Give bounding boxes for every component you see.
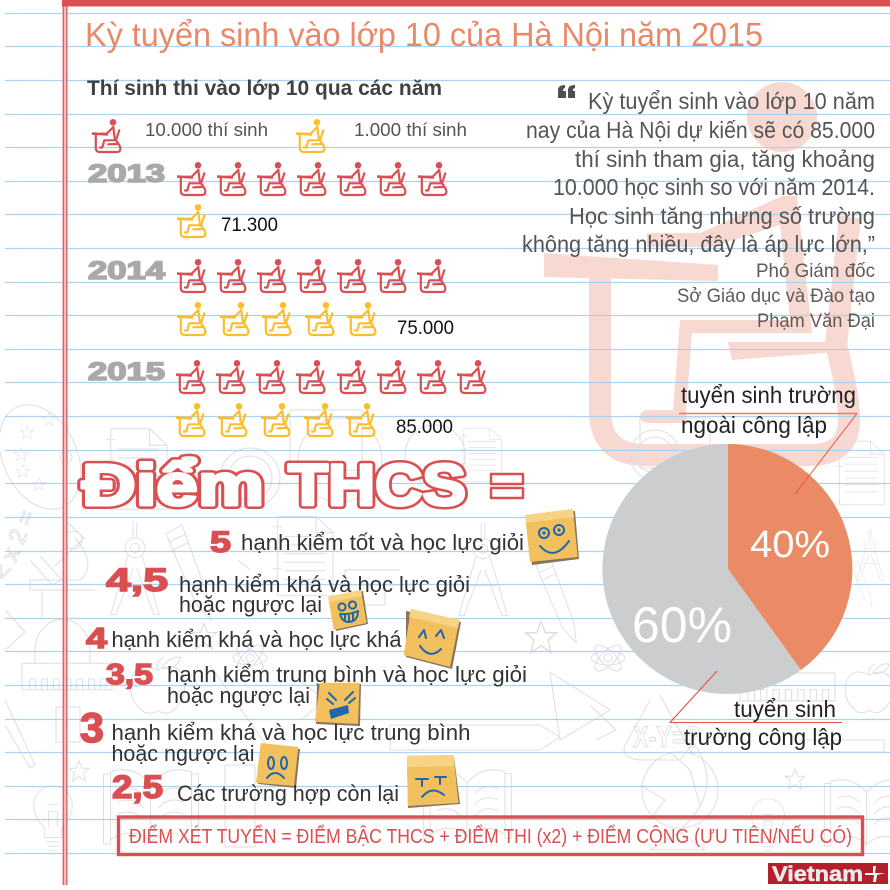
quote attribution: Phạm Văn Đại — [757, 310, 875, 332]
legend — [92, 119, 467, 152]
pictogram row: 2013: 71.300 — [221, 215, 278, 236]
score row: 2,5 — [112, 769, 399, 806]
score row: 4,5 — [106, 562, 470, 617]
score row: 5 — [210, 526, 524, 559]
score row: 3,5: 3,5 — [106, 659, 153, 691]
pie label: private schools — [679, 382, 857, 494]
title: Kỳ tuyển sinh vào lớp 10 của Hà Nội năm 2015 — [85, 16, 763, 53]
pie label: public schools — [670, 671, 842, 750]
pictogram row: 2013 — [88, 160, 446, 237]
score row: 3,5: hoặc ngược lại — [167, 683, 310, 708]
legend: 1.000 thí sinh — [354, 120, 467, 140]
score row: 3: hoặc ngược lại — [112, 741, 254, 766]
pie chart — [602, 444, 852, 694]
score row: 5: hạnh kiểm tốt và học lực giỏi — [241, 530, 524, 555]
pie label: public schools: trường công lập — [684, 724, 842, 750]
icon: sticky note frown — [407, 755, 460, 808]
pie label: public schools: tuyển sinh — [734, 696, 836, 722]
score row: 3: hạnh kiểm khá và học lực trung bình — [112, 720, 470, 745]
big desk watermark icon — [544, 82, 850, 455]
pictogram row: 2013: 2013 — [88, 160, 165, 188]
pictogram row: 2015: 85.000 — [396, 417, 453, 438]
score row: 2,5: Các trường hợp còn lại — [177, 781, 399, 806]
legend: 10.000 thí sinh — [145, 120, 268, 140]
score row: 5: 5 — [210, 526, 231, 559]
quote text: Học sinh tăng nhưng số trường — [569, 203, 875, 229]
score row: 4,5: 4,5 — [106, 562, 168, 598]
pie chart: 60% — [632, 597, 732, 653]
pie chart: 40% — [750, 524, 830, 566]
score row: 4: 4 — [86, 623, 107, 655]
icon: quote mark — [558, 85, 575, 98]
heading: Điểm THCS =: Điểm — [82, 453, 264, 518]
icon: sticky note sad — [256, 743, 300, 788]
icon: sticky note grin — [328, 590, 368, 631]
heading: candidates per year: Thí sinh thi vào lớp 10 qua các năm — [87, 77, 442, 100]
heading: Điểm THCS =: THCS — [288, 453, 466, 518]
icon: sticky note smile with big eyes — [525, 509, 579, 565]
pictogram row: 2014 — [88, 257, 454, 339]
score row: 3 — [80, 704, 470, 766]
quote text: thí sinh tham gia, tăng khoảng — [575, 146, 875, 172]
quote attribution: Phó Giám đốc — [756, 260, 875, 282]
heading: Điểm THCS =: Điểm — [82, 453, 264, 518]
quote text — [522, 88, 875, 257]
pictogram row: 2015: 2015 — [88, 358, 165, 386]
heading: Điểm THCS =: THCS — [288, 453, 466, 518]
background school doodles — [0, 392, 890, 854]
score row: 4: hạnh kiểm khá và học lực khá — [112, 627, 402, 652]
logo: Vietnam+: Vietnam — [772, 863, 863, 886]
pictogram row: 2014: 75.000 — [397, 318, 454, 339]
logo: Vietnam+ — [768, 863, 888, 886]
pictogram row: 2015 — [88, 358, 485, 438]
quote text: 10.000 học sinh so với năm 2014. — [553, 174, 875, 200]
background school doodles: X-Y=? — [633, 721, 700, 754]
icon: sticky note happy — [404, 609, 461, 669]
score row: 4,5: hoặc ngược lại — [179, 592, 322, 617]
quote attribution — [677, 260, 875, 332]
heading: Điểm THCS = — [82, 453, 523, 518]
pie label: private schools: tuyển sinh trường — [681, 382, 856, 408]
quote attribution: Sở Giáo dục và Đào tạo — [677, 285, 875, 307]
formula box — [118, 817, 862, 854]
score row: 3,5: hạnh kiểm trung bình và học lực giỏi — [167, 662, 527, 687]
score row: 3,5 — [106, 659, 527, 708]
score row: 2,5: 2,5 — [112, 769, 163, 805]
pie label: private schools: ngoài công lập — [681, 412, 827, 438]
icon: sticky note angry — [315, 683, 361, 726]
pictogram row: 2014: 2014 — [88, 257, 165, 285]
score row: 3: 3 — [80, 704, 104, 751]
quote text: không tăng nhiều, đây là áp lực lớn,” — [522, 231, 875, 257]
score row: 4,5: hạnh kiểm khá và học lực giỏi — [179, 572, 470, 597]
quote text: Kỳ tuyển sinh vào lớp 10 năm — [588, 88, 875, 114]
